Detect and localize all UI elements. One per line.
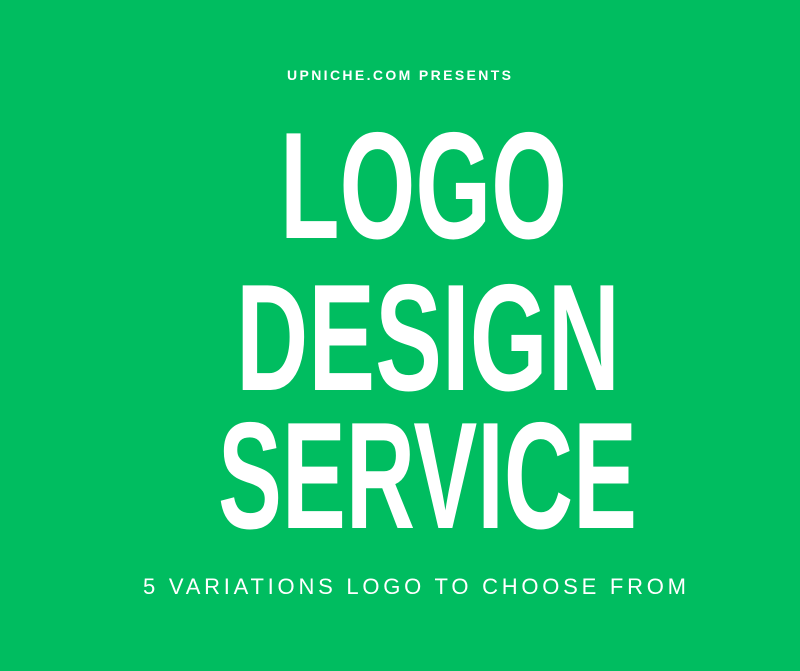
- tagline: 5 VARIATIONS LOGO TO CHOOSE FROM: [143, 574, 686, 599]
- title line: LOGO: LOGO: [280, 101, 567, 271]
- subtitle: presenter: UPNICHE.COM PRESENTS: [287, 67, 511, 83]
- title: [218, 101, 637, 561]
